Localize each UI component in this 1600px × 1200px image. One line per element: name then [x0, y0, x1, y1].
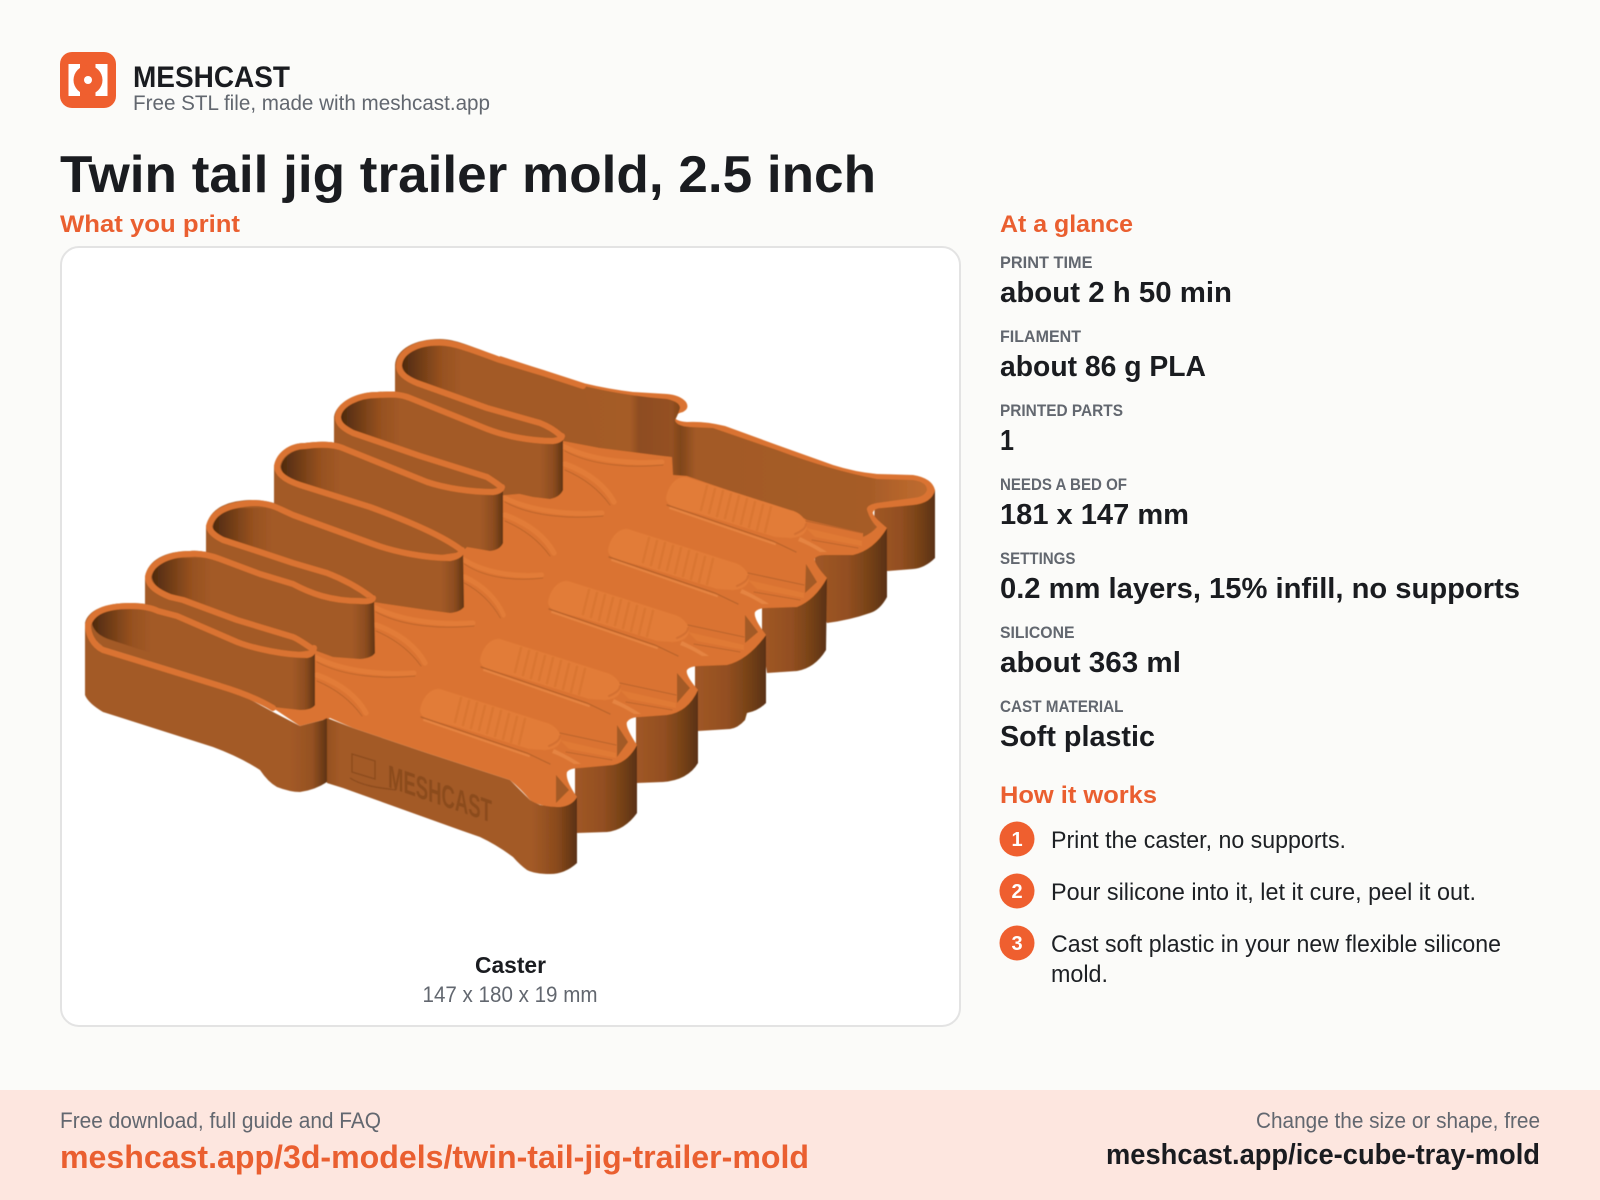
brand tagline: Free STL file, made with meshcast.app [133, 92, 490, 115]
spec: cast material: CAST MATERIAL [1000, 697, 1124, 716]
step 1 [1000, 822, 1346, 856]
logo icon [60, 52, 116, 108]
jig cavities [420, 477, 862, 764]
spec: print time: about 2 h 50 min [1000, 277, 1232, 309]
footer link: meshcast.app/3d-models/twin-tail-jig-trailer-mold [60, 1139, 809, 1175]
staircase triangles [556, 564, 817, 803]
step 1: Print the caster, no supports. [1051, 827, 1346, 854]
spec: filament: about 86 g PLA [1000, 351, 1206, 383]
spec: print time: PRINT TIME [1000, 253, 1092, 272]
spec: printed parts [1000, 401, 1123, 457]
step 2: Pour silicone into it, let it cure, peel it out. [1051, 879, 1476, 906]
footer band [0, 1090, 1600, 1200]
part name: Caster [475, 952, 546, 978]
spec: silicone [1000, 623, 1181, 679]
spec: cast material [1000, 697, 1155, 753]
spec: printed parts: 1 [1000, 425, 1014, 457]
embossed logo [350, 754, 396, 790]
step 3: mold. [1051, 961, 1108, 988]
panel: what you print [61, 247, 960, 1026]
3D model: caster mold [85, 339, 935, 874]
spec: bed size [1000, 475, 1189, 531]
heading: at a glance: At a glance [1000, 211, 1133, 238]
embossed text: MESHCAST [388, 758, 492, 830]
part dimensions: 147 x 180 x 19 mm [422, 982, 598, 1007]
footer right caption: Change the size or shape, free [1256, 1108, 1540, 1133]
heading: how it works: How it works [1000, 782, 1157, 809]
step 1: 1 [1011, 829, 1023, 851]
reservoir 2 [334, 391, 563, 499]
step 3: Cast soft plastic in your new flexible silicone [1051, 931, 1501, 958]
step 2: 2 [1011, 881, 1023, 903]
reservoir 3 [274, 442, 503, 558]
spec: silicone: about 363 ml [1000, 647, 1181, 679]
reservoir 1 [395, 339, 600, 500]
spec: filament: FILAMENT [1000, 327, 1082, 346]
spec: filament [1000, 327, 1206, 383]
spec: settings [1000, 549, 1520, 605]
footer right link: meshcast.app/ice-cube-tray-mold [1106, 1139, 1540, 1171]
spec: settings: SETTINGS [1000, 549, 1076, 568]
inner back wall [500, 362, 927, 537]
front wall with embossed brand [327, 718, 577, 874]
twin tail channels [315, 446, 663, 716]
outer wall lobes [575, 490, 935, 833]
spec: bed size: NEEDS A BED OF [1000, 475, 1127, 494]
reservoir 6 with front wall [85, 603, 327, 792]
step 3 [1000, 926, 1501, 988]
reservoir 4 [206, 500, 464, 613]
spec: print time [1000, 253, 1232, 309]
brand name: MESHCAST [133, 61, 290, 94]
spec: silicone: SILICONE [1000, 623, 1074, 642]
spec: cast material: Soft plastic [1000, 721, 1155, 753]
spec: printed parts: PRINTED PARTS [1000, 401, 1123, 420]
step 2 [1000, 874, 1476, 908]
top surface [273, 356, 935, 807]
footer left caption: Free download, full guide and FAQ [60, 1108, 381, 1133]
title: Twin tail jig trailer mold, 2.5 inch [60, 146, 876, 204]
step 3: 3 [1011, 933, 1023, 955]
reservoir 5 [145, 551, 375, 659]
spec: bed size: 181 x 147 mm [1000, 499, 1189, 531]
spec: settings: 0.2 mm layers, 15% infill, no supports [1000, 573, 1520, 605]
heading: what you print: What you print [60, 211, 240, 238]
